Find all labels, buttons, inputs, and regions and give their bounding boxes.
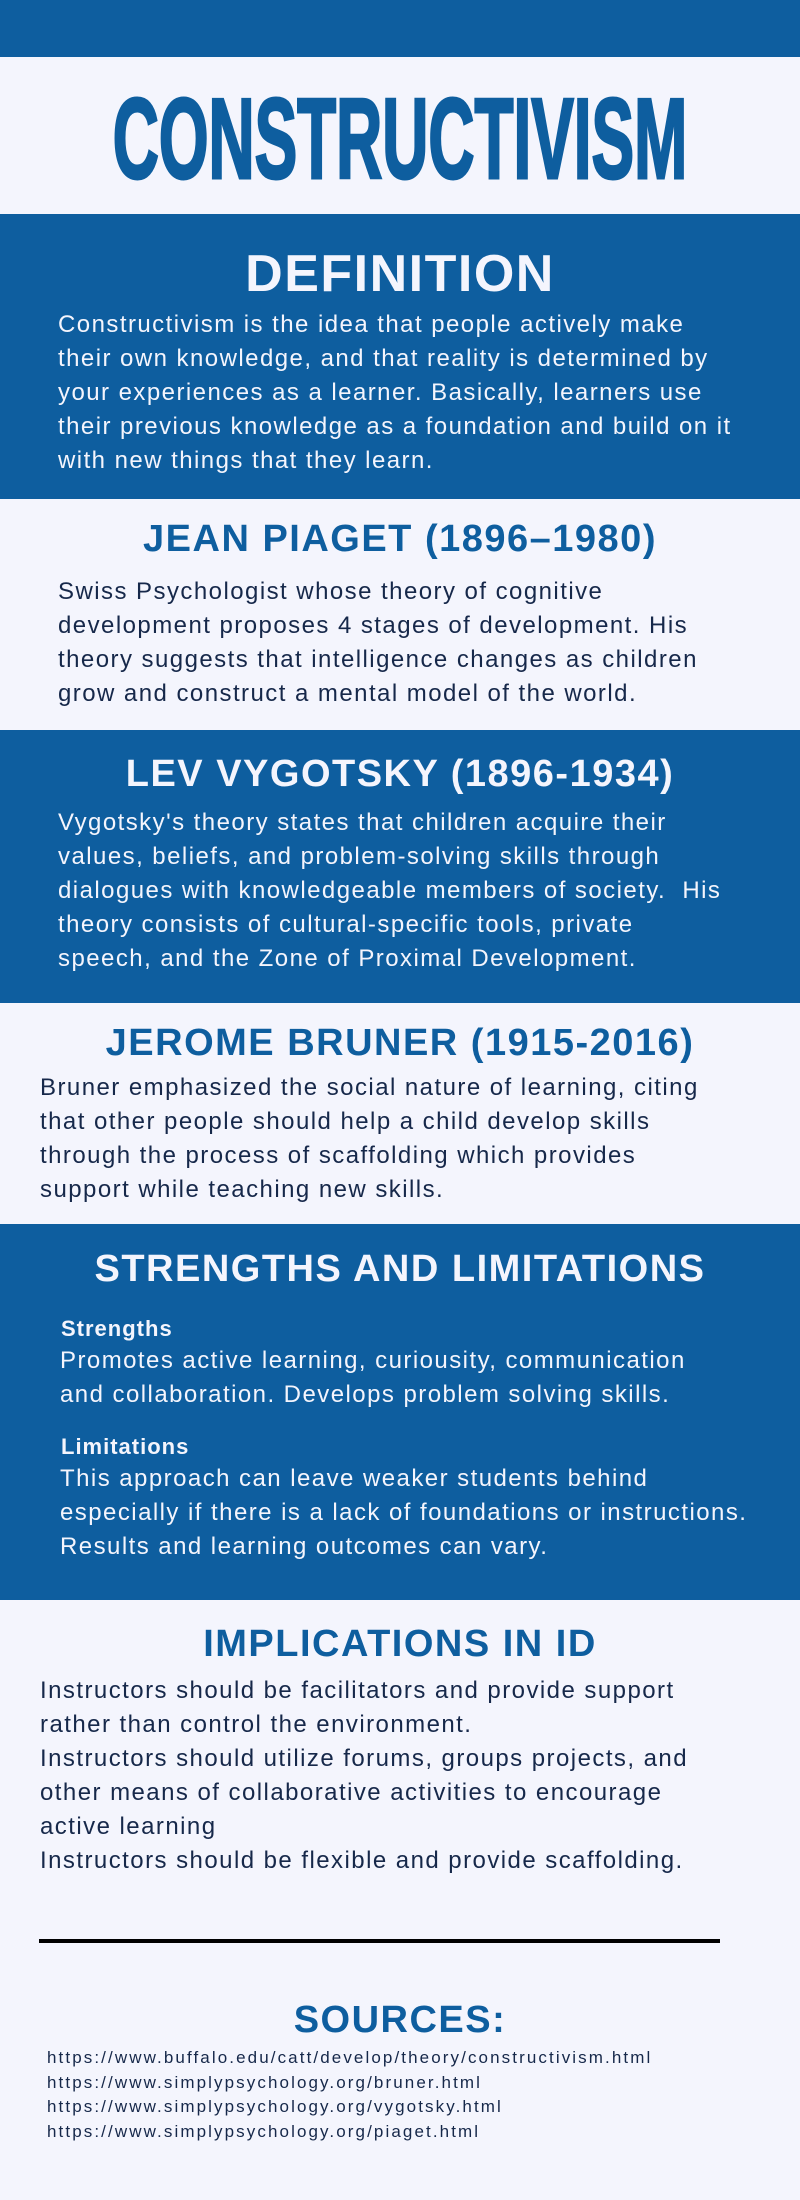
text: implications: Instructors should utilize forums, groups projects, and xyxy=(40,1745,688,1772)
text: piaget: Swiss Psychologist whose theory of cognitive xyxy=(58,578,603,605)
subheading: limitations: Limitations xyxy=(61,1434,189,1459)
text: vygotsky: values, beliefs, and problem-solving skills through xyxy=(58,843,660,870)
text: definition: their previous knowledge as a foundation and build on it xyxy=(58,413,732,440)
text: sources list: https://www.simplypsychology.org/piaget.html xyxy=(47,2122,480,2140)
title xyxy=(0,57,800,214)
text: piaget: development proposes 4 stages of development. His xyxy=(58,612,688,639)
text: sources list: https://www.simplypsychology.org/vygotsky.html xyxy=(47,2097,503,2116)
subheading: strengths: Strengths xyxy=(61,1316,173,1341)
panel: vygotsky xyxy=(0,730,800,1003)
text: implications: active learning xyxy=(40,1813,217,1840)
text: sources list: https://www.buffalo.edu/catt/develop/theory/constructivism.html xyxy=(47,2048,652,2067)
heading: sources: SOURCES: xyxy=(294,1999,506,2041)
panel: bruner xyxy=(0,1003,800,1224)
text: implications xyxy=(40,1677,688,1874)
text: piaget xyxy=(58,578,698,707)
text: bruner: Bruner emphasized the social nature of learning, citing xyxy=(40,1074,699,1101)
text: limitations xyxy=(60,1465,747,1560)
text: limitations: This approach can leave weaker students behind xyxy=(60,1465,648,1492)
text: strengths xyxy=(60,1347,686,1408)
text: piaget: grow and construct a mental model of the world. xyxy=(58,680,637,707)
text: bruner: through the process of scaffolding which provides xyxy=(40,1142,636,1169)
heading: strengths and limitations: STRENGTHS AND LIMITATIONS xyxy=(94,1248,706,1290)
text: vygotsky: speech, and the Zone of Proximal Development. xyxy=(58,945,637,972)
text: vygotsky: Vygotsky's theory states that children acquire their xyxy=(58,809,667,836)
text: piaget: theory suggests that intelligence changes as children xyxy=(58,646,698,673)
heading: definition: DEFINITION xyxy=(245,245,555,303)
heading: bruner: JEROME BRUNER (1915-2016) xyxy=(106,1022,694,1064)
text: vygotsky: theory consists of cultural-specific tools, private xyxy=(58,911,634,938)
text: bruner: support while teaching new skills. xyxy=(40,1176,444,1203)
text: strengths: and collaboration. Develops problem solving skills. xyxy=(60,1381,670,1408)
top bar xyxy=(0,0,800,57)
text: strengths: Promotes active learning, curiousity, communication xyxy=(60,1347,686,1374)
panel: definition xyxy=(0,214,800,499)
text: sources list: https://www.simplypsychology.org/bruner.html xyxy=(47,2072,482,2092)
text: definition: with new things that they learn. xyxy=(58,447,434,474)
text: sources list xyxy=(47,2048,652,2140)
text: implications: Instructors should be flexible and provide scaffolding. xyxy=(40,1847,684,1874)
title: CONSTRUCTIVISM xyxy=(113,76,687,203)
text: bruner: that other people should help a child develop skills xyxy=(40,1108,650,1135)
text: definition xyxy=(58,311,732,474)
text: limitations: especially if there is a lack of foundations or instructions. xyxy=(60,1499,747,1526)
text: definition: Constructivism is the idea that people actively make xyxy=(58,311,684,338)
text: implications: rather than control the environment. xyxy=(40,1711,472,1738)
panel: strengths and limitations xyxy=(0,1224,800,1600)
panel: implications xyxy=(0,1600,800,1930)
heading: piaget: JEAN PIAGET (1896–1980) xyxy=(143,518,657,560)
heading: vygotsky: LEV VYGOTSKY (1896-1934) xyxy=(126,753,674,795)
text: implications: other means of collaborative activities to encourage xyxy=(40,1779,662,1806)
text: bruner xyxy=(40,1074,699,1203)
heading: implications: IMPLICATIONS IN ID xyxy=(203,1623,597,1665)
text: definition: your experiences as a learner. Basically, learners use xyxy=(58,379,703,406)
text: definition: their own knowledge, and that reality is determined by xyxy=(58,345,709,372)
text: vygotsky: dialogues with knowledgeable members of society. His xyxy=(58,877,721,904)
panel: piaget xyxy=(0,499,800,730)
text: implications: Instructors should be facilitators and provide support xyxy=(40,1677,675,1704)
text: vygotsky xyxy=(58,809,721,972)
text: limitations: Results and learning outcomes can vary. xyxy=(60,1533,548,1560)
